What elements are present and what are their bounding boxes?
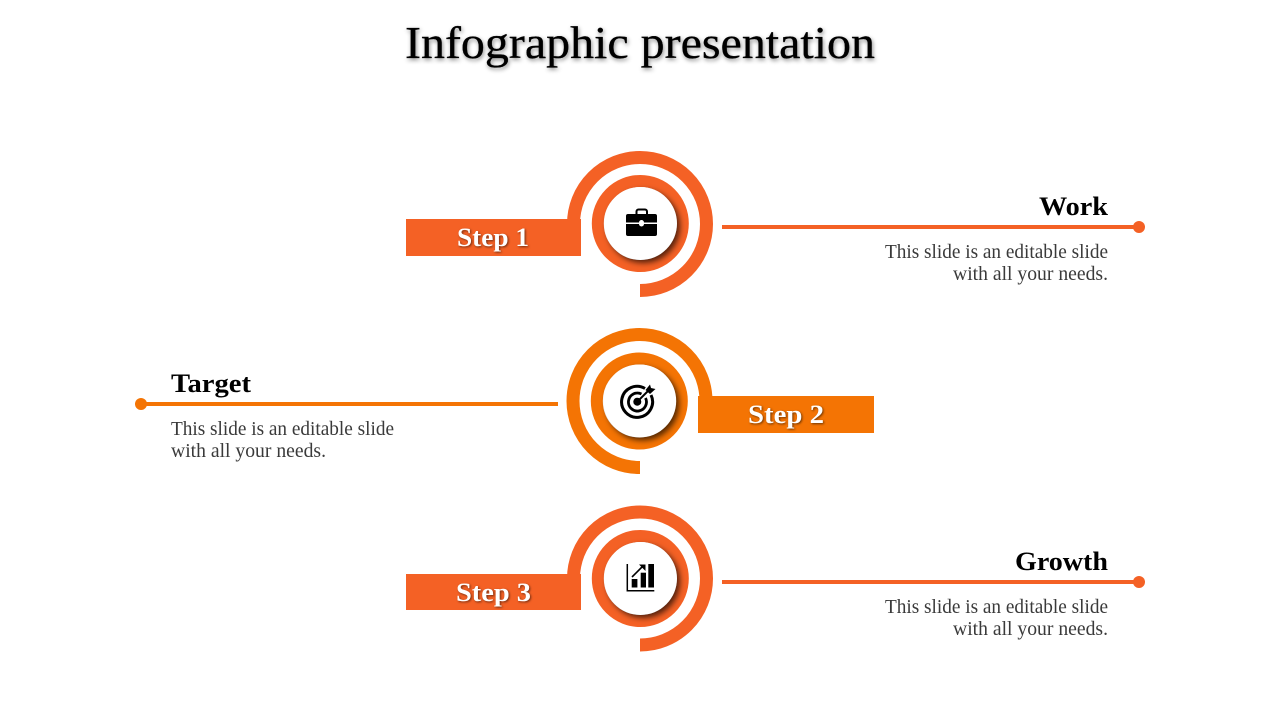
text block: work description: with all your needs. [953,264,1108,285]
step 2 connector line [135,398,558,410]
step 3 white disc [604,542,677,615]
panel: step 1 work [406,158,1145,290]
heading: growth: Growth [1015,547,1109,576]
text block: growth description: with all your needs. [953,619,1108,640]
text block: growth description: This slide is an editable slide [885,597,1108,618]
text block: work description: This slide is an editable slide [885,242,1108,263]
icon: briefcase [626,210,657,236]
step 1 banner: Step 1 [457,223,529,252]
text block: target description [171,419,394,462]
title: Infographic presentation [405,17,875,68]
step 3 inner ring [598,536,683,621]
step 1 inner ring [598,181,683,266]
step 1 white disc [604,187,677,260]
step 2 banner: Step 2 [748,400,824,429]
text block: target description: with all your needs. [171,441,326,462]
heading: work: Work [1039,192,1109,221]
icon: target with arrow [622,384,656,417]
heading: target: Target [171,369,251,398]
step 2 outer spiral ring [573,335,706,468]
step 1 banner [406,219,581,256]
step 1 outer spiral ring [574,158,707,290]
icon: rising bar chart [627,564,654,591]
text block: target description: This slide is an editable slide [171,419,394,440]
step 3 banner [406,574,581,610]
step 1 connector line [722,221,1145,233]
step 2 white disc [603,364,676,438]
step 2 banner [698,396,874,433]
step 2 inner ring [597,358,682,444]
panel: step 3 growth [406,512,1145,645]
step 3 outer spiral ring [574,512,707,645]
step 3 banner: Step 3 [456,578,531,607]
text block: growth description [885,597,1108,640]
panel: step 2 target [135,335,874,468]
text block: work description [885,242,1108,285]
step 3 connector line [722,576,1145,588]
